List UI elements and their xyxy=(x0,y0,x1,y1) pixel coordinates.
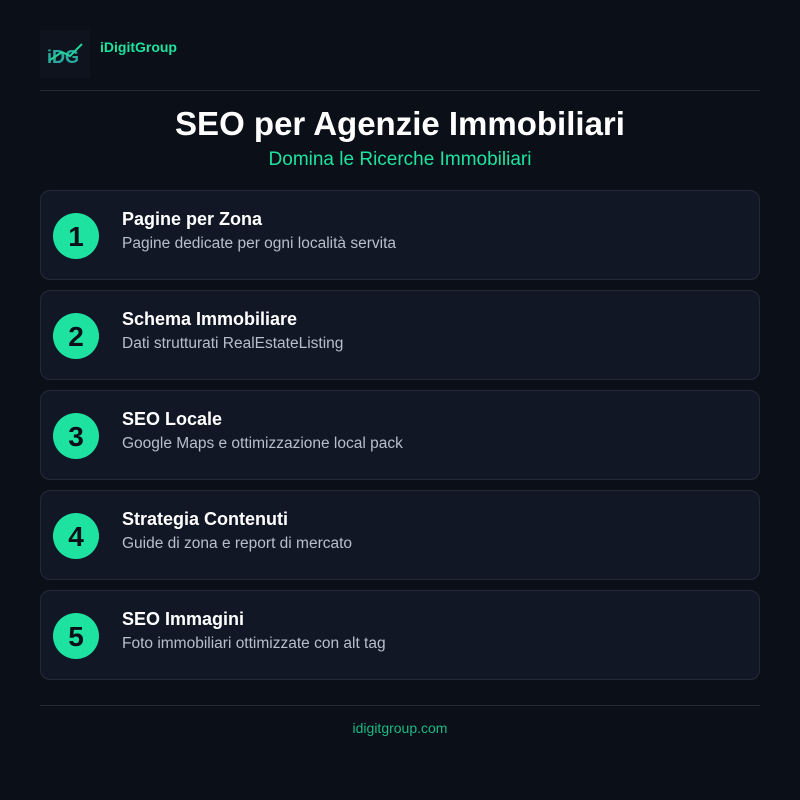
card 2: 2 xyxy=(68,321,84,352)
card 4 xyxy=(40,490,760,580)
card 4: Strategia Contenuti xyxy=(122,509,288,529)
card 5: SEO Immagini xyxy=(122,609,244,629)
logo: iDG xyxy=(47,47,79,67)
logo xyxy=(40,30,90,78)
brand name: iDigitGroup xyxy=(100,39,177,55)
subtitle: Domina le Ricerche Immobiliari xyxy=(269,149,531,170)
card 4: 4 xyxy=(68,521,84,552)
card 5 xyxy=(40,590,760,680)
card 1 xyxy=(40,190,760,280)
card 3: SEO Locale xyxy=(122,409,222,429)
card 2: Dati strutturati RealEstateListing xyxy=(122,335,343,352)
card 2: Schema Immobiliare xyxy=(122,309,297,329)
card 3: Google Maps e ottimizzazione local pack xyxy=(122,435,403,452)
title: SEO per Agenzie Immobiliari xyxy=(175,105,625,142)
card 2 xyxy=(40,290,760,380)
card 1: 1 xyxy=(68,221,84,252)
card 3: 3 xyxy=(68,421,84,452)
card 1: Pagine dedicate per ogni località servita xyxy=(122,235,396,252)
card 1: Pagine per Zona xyxy=(122,209,262,229)
card 4: Guide di zona e report di mercato xyxy=(122,535,352,552)
card 5: Foto immobiliari ottimizzate con alt tag xyxy=(122,635,386,652)
card 3 xyxy=(40,390,760,480)
card 5: 5 xyxy=(68,621,84,652)
footer url: idigitgroup.com xyxy=(353,720,447,736)
